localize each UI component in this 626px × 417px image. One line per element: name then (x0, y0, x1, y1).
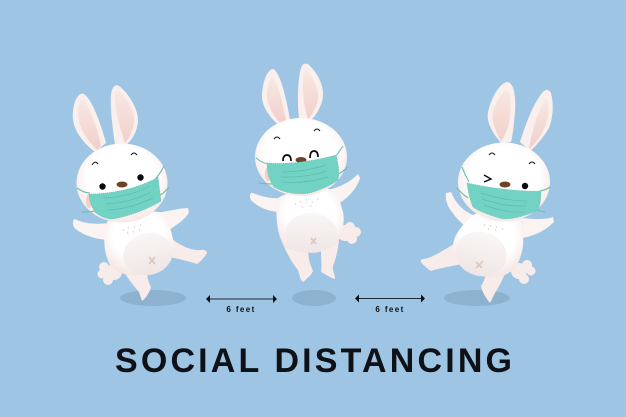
right ear (520, 90, 553, 151)
cheek (86, 194, 92, 208)
left ear (488, 82, 515, 143)
brows (92, 153, 137, 165)
left ear (73, 94, 106, 152)
mask (267, 155, 339, 194)
left arm (446, 192, 476, 228)
mask straps (457, 167, 550, 212)
nose (116, 182, 128, 188)
left ear inner (78, 100, 101, 150)
chest fur (123, 224, 141, 234)
body (104, 211, 174, 275)
raised leg (158, 236, 207, 264)
left leg (282, 242, 313, 282)
open eye (522, 183, 528, 189)
navel (149, 257, 155, 264)
mask straps (77, 166, 169, 212)
raised leg (421, 244, 470, 271)
right ear inner (529, 98, 548, 149)
label: 6 feet: 6 feet (375, 305, 405, 314)
wink eye (484, 175, 491, 182)
mask pleats (281, 165, 328, 182)
lower leg (481, 266, 507, 303)
shadow (292, 290, 336, 306)
left arm (250, 193, 282, 212)
mask (89, 177, 161, 219)
arrow: 6 feet left (206, 295, 277, 314)
navel (476, 261, 483, 268)
lower leg (122, 266, 151, 301)
eyes (99, 174, 144, 190)
left ear inner (492, 90, 511, 141)
mask pleats (104, 186, 153, 210)
tail (337, 222, 361, 244)
rabbit centre (250, 64, 361, 306)
nose (500, 182, 510, 188)
shadow (444, 290, 510, 306)
label: 6 feet: 6 feet (226, 305, 256, 314)
eyes (283, 151, 318, 161)
right arm (150, 208, 189, 232)
title: SOCIAL DISTANCING (115, 342, 512, 380)
tail (511, 260, 536, 284)
mask (467, 183, 541, 219)
rabbit right (421, 82, 554, 306)
head (458, 142, 550, 222)
mask pleats (481, 193, 527, 212)
cheek (535, 193, 541, 207)
shadow (120, 290, 186, 306)
brows (489, 153, 535, 164)
head (255, 118, 347, 196)
right ear inner (115, 91, 134, 143)
right ear (298, 64, 323, 121)
navel (311, 238, 316, 244)
rabbit left (73, 85, 207, 306)
chest fur (484, 224, 503, 231)
tail (98, 262, 122, 285)
belly (285, 213, 337, 253)
right arm (328, 174, 360, 204)
left arm (73, 219, 114, 240)
head (76, 144, 168, 222)
right ear inner (303, 71, 318, 119)
brows (274, 129, 320, 139)
left ear inner (267, 77, 286, 124)
right leg (321, 240, 339, 279)
right ear (111, 85, 138, 145)
nose (296, 157, 306, 163)
mask straps (256, 146, 347, 184)
cheek (265, 167, 271, 181)
body (453, 211, 524, 277)
right arm (520, 217, 554, 238)
left ear (262, 69, 290, 126)
body (276, 188, 344, 252)
chest fur (295, 198, 318, 208)
belly (450, 226, 512, 282)
arrow: 6 feet right (355, 294, 425, 314)
belly (118, 227, 178, 281)
